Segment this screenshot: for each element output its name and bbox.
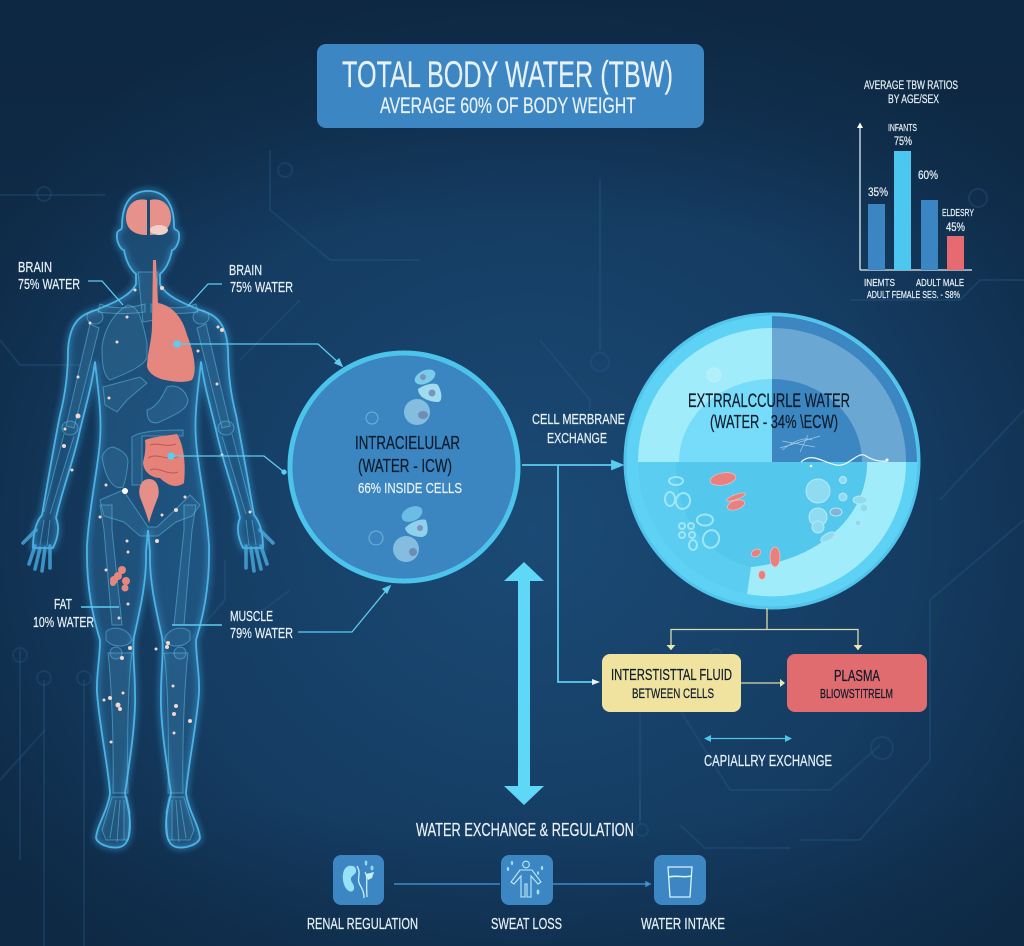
connector: regulation flow	[394, 882, 650, 886]
box: interstitial fluid: INTERSTISTTAL FLUID	[611, 667, 732, 684]
bar chart: average TBW ratios: ADULT FEMALE SES. - S8%	[867, 289, 960, 301]
box: plasma: PLASMA	[834, 668, 880, 685]
label: brain right	[229, 263, 293, 296]
panel: intracellular water circle	[290, 353, 518, 581]
organ: intestines	[143, 434, 185, 486]
label: fat: 10% WATER	[33, 615, 94, 631]
box: plasma	[787, 654, 927, 712]
intracellular text	[355, 433, 462, 497]
bar chart: average TBW ratios: 45%	[946, 220, 965, 234]
label: cell membrane exchange: EXCHANGE	[547, 431, 607, 447]
extracellular text: EXTRRALCCURLE WATER	[688, 391, 850, 412]
bar chart: average TBW ratios: 35%	[868, 185, 888, 199]
bar chart: average TBW ratios: ADULT MALE	[916, 277, 964, 289]
body glow	[33, 191, 263, 848]
box: interstitial fluid: BETWEEN CELLS	[632, 686, 714, 701]
organ: fat cluster	[110, 566, 130, 592]
intracellular text: 66% INSIDE CELLS	[358, 480, 462, 497]
heading: water exchange and regulation: WATER EXCHANGE & REGULATION	[416, 819, 634, 840]
extracellular text: (WATER - 34% \ECW)	[710, 412, 838, 432]
bar chart: average TBW ratios: 60%	[918, 168, 938, 182]
arrow: vertical double-headed exchange	[504, 562, 544, 805]
label: muscle: 79% WATER	[230, 626, 293, 642]
intracellular text: (WATER - ICW)	[358, 456, 452, 476]
organ: esophagus and lung	[147, 260, 195, 382]
quadrant: top left	[638, 328, 772, 462]
label: brain left	[18, 260, 80, 293]
organ: brain	[126, 199, 171, 235]
pale cell outlines	[665, 477, 722, 550]
icon: sweat loss	[501, 855, 553, 905]
bar chart: average TBW ratios	[857, 80, 974, 301]
hands and fingers	[23, 530, 273, 571]
leader lines from body labels	[81, 281, 390, 632]
label: capillary exchange: CAPIALLRY EXCHANGE	[704, 753, 832, 770]
panel: extracellular water circle	[625, 314, 919, 608]
subtitle: AVERAGE 60% OF BODY WEIGHT	[380, 93, 636, 118]
skeleton and inner structures	[40, 272, 256, 842]
label: cell membrane exchange	[532, 412, 625, 447]
label: sweat loss: SWEAT LOSS	[491, 916, 562, 933]
icon: upper cells	[404, 366, 441, 425]
interstitial particles	[806, 476, 868, 544]
human body figure	[23, 191, 273, 848]
label: brain left: 75% WATER	[18, 277, 80, 293]
label: water intake: WATER INTAKE	[641, 916, 725, 933]
icon: renal regulation	[333, 855, 384, 905]
arrow: capillary exchange	[704, 735, 792, 742]
title: TOTAL BODY WATER (TBW)	[342, 54, 673, 95]
icon: lower cells	[393, 503, 428, 562]
quadrant: top right	[772, 316, 917, 462]
tissue dots	[62, 286, 252, 744]
quadrant: bottom	[638, 462, 906, 596]
organ: bladder	[139, 479, 159, 523]
box: interstitial fluid	[602, 654, 741, 712]
extracellular text	[688, 391, 850, 432]
intracellular text: INTRACIELULAR	[355, 433, 460, 453]
red blood cells	[709, 471, 780, 580]
bar chart: average TBW ratios: BY AGE/SEX	[888, 94, 939, 106]
label: fat	[33, 597, 94, 631]
label: brain right: BRAIN	[229, 263, 262, 279]
bar chart: average TBW ratios: INEMTS	[864, 277, 895, 289]
bar chart: average TBW ratios: INFANTS	[888, 122, 917, 134]
bar chart: average TBW ratios: 75%	[894, 134, 912, 148]
label: muscle	[230, 609, 293, 642]
label: cell membrane exchange: CELL MERBRANE	[532, 412, 625, 428]
box: plasma: BLIOWSTITRELM	[820, 686, 893, 701]
membrane wave and fibres	[780, 435, 887, 465]
label: fat: FAT	[54, 597, 72, 613]
arrows: membrane exchange connectors	[522, 461, 622, 685]
arrows: ECW branch to fluid boxes	[666, 608, 862, 687]
label: brain right: 75% WATER	[230, 280, 293, 296]
title banner	[317, 44, 704, 128]
label: muscle: MUSCLE	[230, 609, 273, 625]
label: renal regulation: RENAL REGULATION	[307, 916, 418, 933]
body silhouette	[33, 191, 263, 848]
bar chart: average TBW ratios: AVERAGE TBW RATIOS	[864, 80, 958, 92]
bar chart: average TBW ratios: ELDESRY	[942, 207, 974, 219]
label: brain left: BRAIN	[18, 260, 52, 276]
icon: water intake	[654, 855, 706, 905]
